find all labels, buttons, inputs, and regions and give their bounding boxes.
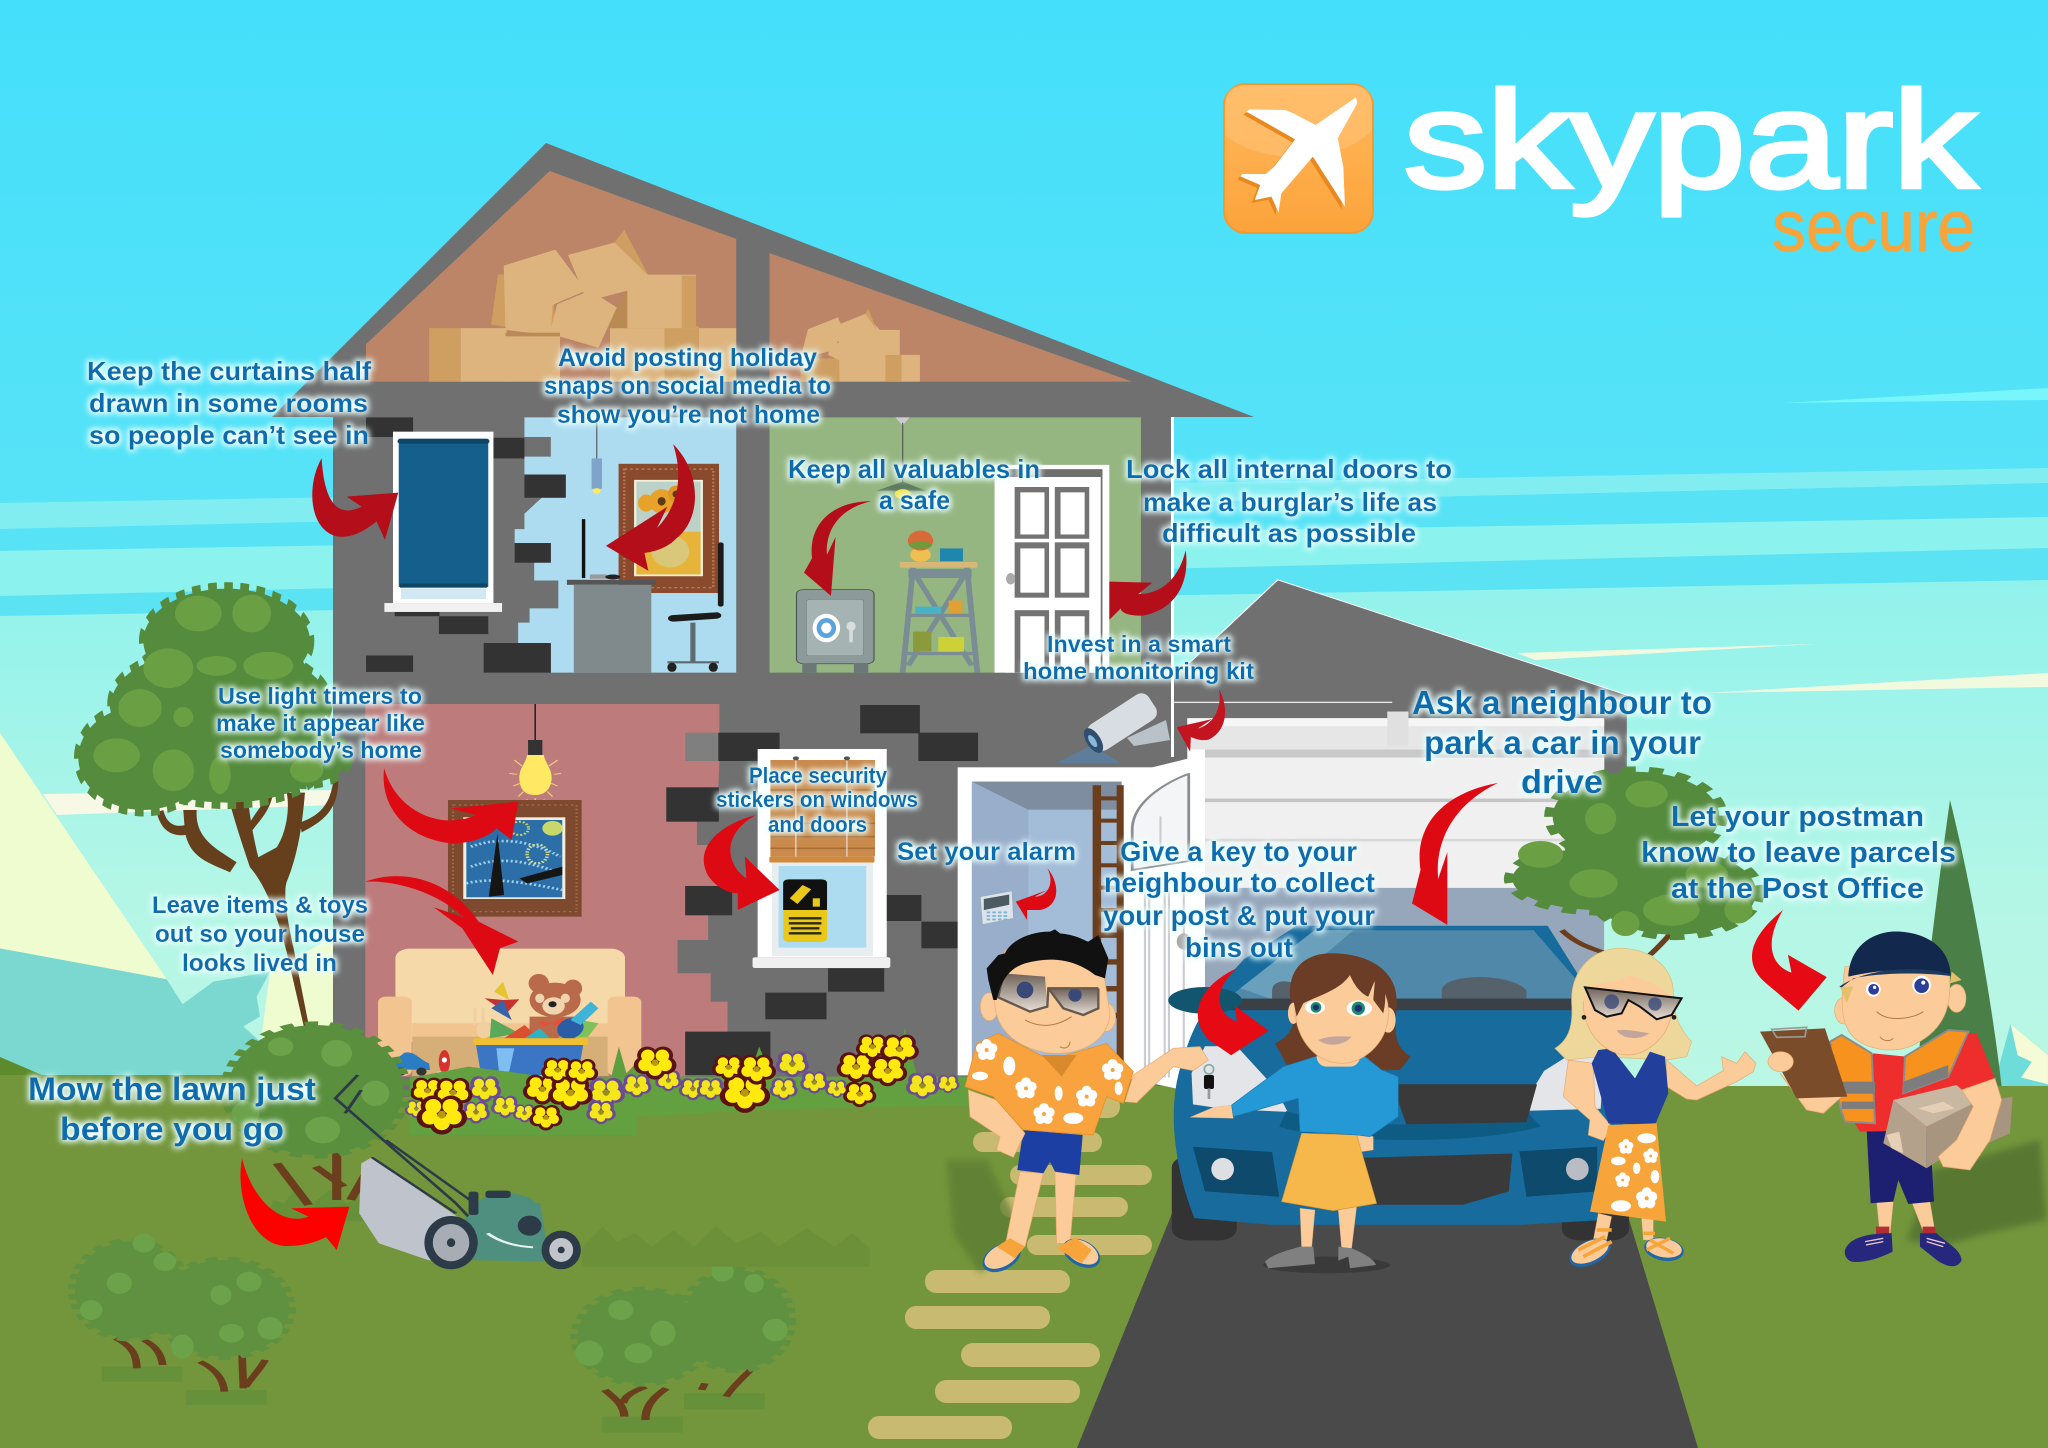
postman shadow [1907,1140,2047,1247]
mountains left [0,733,333,1100]
tip: curtains: Keep the curtains half [87,356,371,386]
pink room [365,704,728,1077]
shirt print [972,1039,1123,1124]
big tree left [78,589,348,1031]
lawn shrub three [684,1262,789,1409]
side mirror [1168,987,1242,1014]
logo wordmark: skypark [1404,64,1977,217]
security camera [1056,690,1170,763]
car body [1174,926,1624,1225]
shelf with items [900,531,977,673]
tip: smart home kit: home monitoring kit [1023,658,1254,684]
postman lower arm [1780,1073,1842,1113]
tip: toys: out so your house [155,921,365,948]
fog lights [1193,1147,1597,1197]
starry night painting [448,800,582,917]
tip: toys: looks lived in [182,950,337,977]
woman top [1232,1057,1398,1137]
blonde skirt [1590,1123,1666,1222]
tip: give a key: your post & put your [1103,900,1375,931]
skirt print [1611,1133,1659,1212]
tip: postman [1641,801,1956,905]
arrow: toys [365,876,518,975]
arrow: light timers [384,768,518,843]
postman head [1835,932,1966,1050]
garage roof [1173,580,1636,852]
security sticker [783,879,827,942]
tip: give a key [1103,836,1375,963]
pendant lamp blue room [592,417,602,494]
arrow: social media [606,444,695,571]
tip: park a car [1412,684,1712,800]
hood crease and grille [1279,1111,1541,1140]
interior door [995,465,1109,673]
car seats [1272,977,1526,999]
arrow: safe [804,501,871,596]
arrow: park a car [1412,783,1498,925]
shrub behind mower [228,1025,403,1222]
arrow: stickers [704,815,780,910]
tip: internal doors: make a burglar’s life as [1143,487,1437,517]
blonde arms [1563,1052,1756,1141]
driveway [1077,1090,1698,1448]
dark bricks [366,417,566,673]
canopy [78,589,348,810]
front door and hallway [958,756,1198,1093]
tip: safe: Keep all valuables in [788,454,1040,484]
safety vest [1830,1030,1968,1123]
distant hill [0,1057,42,1075]
woman hair back [1275,953,1411,1071]
postman shorts [1867,1130,1934,1204]
shrubs [75,1025,870,1433]
car dash [1228,999,1592,1010]
desk with monitor [567,519,656,673]
safe [797,589,874,673]
windshield [1226,930,1594,999]
tip: holiday snaps: snaps on social media to [544,372,831,400]
tip: postman: Let your postman [1671,801,1924,833]
toy rocket [434,1050,451,1077]
clipboard [1760,1027,1847,1098]
tip: park a car: park a car in your [1424,724,1701,761]
curtained window [384,432,502,612]
man head [980,929,1116,1053]
sofa [378,949,641,1076]
woman in blue [1190,953,1411,1273]
tip: internal doors: Lock all internal doors to [1126,454,1452,484]
blue room [515,417,736,673]
blonde hair [1555,948,1692,1060]
blonde top [1592,1048,1668,1125]
man shadow [947,1160,1023,1273]
staircase [1093,785,1124,1080]
arrow: curtains [312,458,398,540]
man shirt [965,1033,1133,1135]
man with key [947,929,1214,1278]
lawn shrub two [160,1260,289,1405]
lawn shrub four [575,1290,706,1433]
sunflower painting [619,464,719,593]
tip: light timers: make it appear like [216,710,425,736]
flower bed grass [410,1028,968,1135]
arrow: give a key [1198,968,1269,1055]
car wheels [1172,1156,1629,1240]
tip: light timers: somebody’s home [220,737,422,763]
pine tree [1915,800,2002,1090]
tip: holiday snaps: Avoid posting holiday [558,344,817,372]
tip: smart home kit: Invest in a smart [1047,631,1231,657]
tip: mow the lawn: Mow the lawn just [28,1071,316,1107]
windshield reflections [1240,930,1353,999]
open door leaf [1125,756,1198,1093]
woman arm and hand [1190,1105,1373,1152]
pendant lamp green room [877,417,926,499]
attic and upper rooms [366,171,1141,673]
man legs and sandals [977,1172,1105,1278]
tip: park a car: Ask a neighbour to [1412,684,1712,721]
cardboard boxes right attic [801,308,920,382]
tip: mow the lawn: before you go [60,1111,284,1147]
tip: holiday snaps: show you’re not home [557,401,820,429]
arrow: postman [1752,910,1827,1011]
lawn mower [335,1075,581,1269]
security window [753,749,890,968]
postman legs and shoes [1845,1202,1962,1266]
headlights [1192,1046,1604,1112]
stepping stones [868,1095,1152,1439]
alarm keypad [980,891,1013,924]
logo [1224,64,1977,267]
tip: postman: know to leave parcels [1641,837,1956,869]
mountain right [1993,1024,2048,1089]
blonde legs and sandals [1565,1213,1686,1273]
plane icon shadow [1238,100,1354,215]
walls [333,415,1174,1097]
lawn shrub one [75,1234,184,1382]
logo icon [1224,84,1373,233]
man shorts [1017,1130,1083,1175]
lawn [0,1075,2048,1448]
wall bricks [666,705,978,1075]
tip: park a car: drive [1521,763,1603,800]
attic rooms [366,171,736,382]
tip: security stickers: and doors [768,812,867,837]
parked car [1168,926,1629,1240]
tip: security stickers: Place security [749,763,888,788]
man arms [968,1047,1208,1157]
long grass tuft [582,1227,870,1267]
sky cloud bands [0,388,2048,815]
tip: security stickers [716,763,918,837]
roof [272,143,1254,417]
tip: safe: a safe [879,485,950,515]
tip: curtains: drawn in some rooms [89,388,368,418]
arrow: monitoring kit [1177,689,1225,752]
house body [272,143,1254,1097]
tip: light timers [216,683,425,763]
garage [1173,580,1636,1031]
woman skirt [1282,1133,1377,1211]
arrow: mow the lawn [240,1158,349,1250]
tip: security stickers: stickers on windows [716,787,918,812]
tip: toys [152,892,368,977]
lower floor [365,704,978,1077]
toy box with teddy [473,974,598,1075]
logo sublabel: secure [1772,187,1975,267]
woman head [1288,958,1396,1067]
tip: safe [788,454,1040,515]
tip: mow the lawn [28,1071,316,1147]
green room [770,417,1141,673]
arrow: internal doors [1109,551,1186,620]
tip: holiday snaps [544,344,831,429]
tree right [1512,772,1756,955]
tip: internal doors: difficult as possible [1162,518,1416,548]
tip: curtains [87,356,371,450]
light bulb [509,704,561,805]
tip: give a key: neighbour to collect [1104,867,1375,898]
tip: give a key: bins out [1185,932,1293,963]
tip: internal doors [1126,454,1452,548]
office chair [667,544,721,672]
yellow flowers [405,1034,959,1135]
blonde head [1578,956,1682,1055]
car key [1204,1065,1214,1099]
tip: light timers: Use light timers to [218,683,422,709]
tip: smart home kit [1023,631,1254,684]
trunk [227,790,310,1031]
parcel [1883,1085,2013,1168]
postman arm [1938,1078,2002,1170]
toy car [392,1052,430,1076]
canopy leaves [93,595,323,794]
tip: curtains: so people can’t see in [89,420,369,450]
blonde woman [1555,948,1756,1273]
woman legs and shoes [1263,1207,1390,1273]
postman [1760,932,2047,1266]
garage door [1173,702,1604,1031]
tip: give a key: Give a key to your [1120,836,1357,867]
tips text [28,344,1956,1147]
tip: toys: Leave items & toys [152,892,368,919]
cardboard boxes left attic [429,230,736,382]
plane icon [1241,97,1357,212]
postman shirt [1840,1033,1995,1132]
arrow: alarm [1016,868,1056,920]
tip: postman: at the Post Office [1671,873,1924,905]
tip: alarm: Set your alarm [897,838,1076,866]
flower bed [405,1028,968,1135]
